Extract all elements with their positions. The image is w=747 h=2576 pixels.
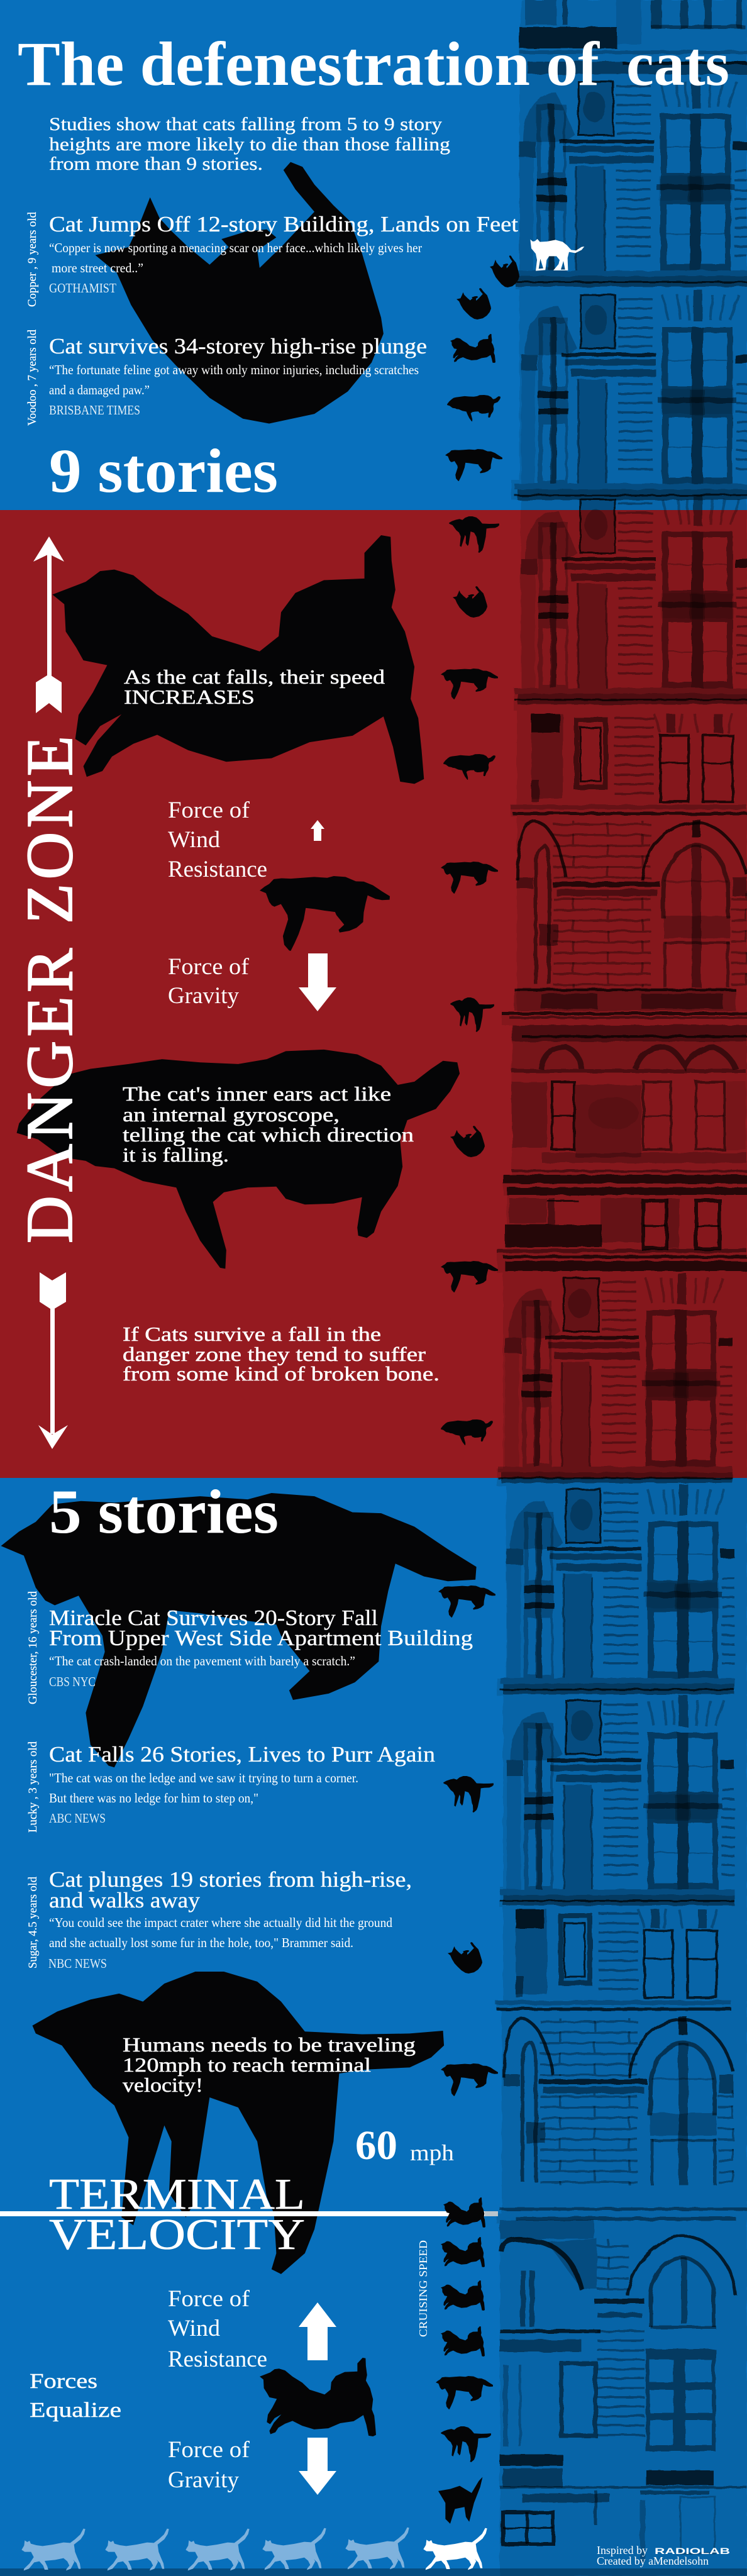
text: speed increases: INCREASES [124,686,255,708]
story: Sugar: NBC NEWS [48,1956,107,1971]
vertical label: Copper: Copper , 9 years old [26,212,39,307]
story: Gloucester: Miracle Cat Survives 20-Story Fall [49,1606,378,1630]
speed value: 60 mph: mph [410,2140,454,2165]
arrow: small wind resistance [311,820,324,841]
story: Copper: more street cred..” [52,260,143,275]
icon: white cat on the ledge [530,239,584,271]
story: Sugar [48,1867,412,1971]
story: Lucky: But there was no ledge for him to step on," [49,1790,258,1806]
text: human terminal velocity: Humans needs to be traveling [123,2033,416,2056]
big cat: curled falling cat [96,162,384,423]
story: Gloucester: From Upper West Side Apartment Building [49,1626,473,1650]
story: Lucky [49,1742,435,1826]
label: force of wind resistance: Wind [168,827,220,853]
story: Sugar: and she actually lost some fur in the hole, too," Brammer said. [49,1935,353,1950]
panel: bottom blue background [0,1478,747,2576]
heading: terminal velocity: VELOCITY [49,2211,305,2259]
story: Voodoo: and a damaged paw.” [49,382,150,397]
label: force of wind resistance, equalized: Wind [168,2316,220,2341]
label: force of gravity: Gravity [168,983,239,1009]
speed value: 60 mph: 60 [355,2123,397,2168]
label: force of wind resistance: Force of [168,797,250,823]
big cat: twisting cat in danger zone [52,535,424,784]
credits: Created by aMendelsohn [597,2555,709,2567]
text: human terminal velocity [123,2033,416,2096]
story: Lucky: "The cat was on the ledge and we saw it trying to turn a corner. [49,1770,358,1785]
heading: terminal velocity [49,2170,305,2259]
terminal velocity line [0,2211,498,2216]
text: forces equalize: Forces [30,2370,97,2393]
vertical label: Gloucester: Gloucester, 16 years old [26,1591,40,1704]
text: inner ear gyroscope: it is falling. [123,1143,229,1166]
panel: danger zone red background [0,510,747,1478]
text: forces equalize: Equalize [30,2399,121,2422]
heading: terminal velocity: TERMINAL [49,2170,305,2219]
text: inner ear gyroscope: telling the cat which direction [123,1123,414,1146]
label: force of gravity, equalized: Gravity [168,2467,239,2493]
story: Lucky: Cat Falls 26 Stories, Lives to Purr Again [49,1742,435,1767]
vertical label: Voodoo: Voodoo , 7 years old [26,330,39,426]
intro text [49,114,450,174]
bottom ground strip [0,2568,747,2576]
arrow: danger zone top [33,536,64,713]
text: speed increases: As the cat falls, their speed [124,665,385,688]
vertical label: Lucky: Lucky , 3 years old [26,1741,40,1833]
title: cats [626,29,729,99]
panel: top blue background [0,0,747,510]
label: force of wind resistance, equalized [168,2286,267,2372]
story: Copper [49,212,518,296]
story: Copper: “Copper is now sporting a menacing scar on her face...which likely gives her [49,240,422,255]
column of small falling cats [436,255,519,2524]
story: Copper: GOTHAMIST [49,280,116,296]
text: human terminal velocity: velocity! [123,2074,203,2096]
story: Gloucester: “The cat crash-landed on the pavement with barely a scratch.” [49,1653,355,1668]
row of walking cats at the bottom [21,2528,487,2570]
text: broken bones [123,1323,440,1385]
label: force of gravity, equalized [168,2437,250,2493]
intro text: heights are more likely to die than those falling [49,134,450,155]
label: force of gravity, equalized: Force of [168,2437,250,2463]
big cat: cat under force arrows in danger zone [260,876,390,951]
story: Copper: Cat Jumps Off 12-story Building, Lands on Feet [49,212,518,236]
text: inner ear gyroscope: an internal gyroscope, [123,1103,340,1126]
text: broken bones: danger zone they tend to suffer [123,1343,426,1365]
story: Voodoo [49,334,427,418]
intro text: Studies show that cats falling from 5 to 9 story [49,114,442,135]
label: force of wind resistance, equalized: Force of [168,2286,250,2312]
big cat: flat spreading cat [17,1050,460,1269]
story: Sugar: “You could see the impact crater where she actually did hit the ground [49,1915,392,1930]
big cat: cat between equal forces [260,2358,376,2436]
heading: 5 stories: 5 stories [49,1477,279,1546]
arrow: wind resistance, equalized [299,2302,336,2360]
text: forces equalize [30,2370,121,2422]
big cat: cat behind 5 stories [1,1493,477,1767]
intro text: from more than 9 stories. [49,153,263,174]
story: Voodoo: BRISBANE TIMES [49,402,140,418]
text: broken bones: If Cats survive a fall in the [123,1323,381,1345]
credits: Inspired by [597,2544,648,2557]
vertical heading: DANGER ZONE: DANGER ZONE [13,736,86,1243]
speed value: 60 mph [355,2123,454,2168]
story: Sugar: Cat plunges 19 stories from high-rise, [49,1867,412,1892]
text: speed increases [124,665,385,708]
credits: RADIOLAB [655,2546,730,2556]
story: Gloucester [49,1606,473,1689]
text: inner ear gyroscope: The cat's inner ears act like [123,1082,391,1105]
arrow: danger zone bottom [38,1272,68,1449]
label: force of wind resistance: Resistance [168,857,267,882]
building facade [495,0,747,2576]
story: Sugar: and walks away [49,1888,201,1913]
story: Voodoo: Cat survives 34-storey high-rise plunge [49,334,427,358]
story: Gloucester: CBS NYC [49,1674,96,1689]
story: Lucky: ABC NEWS [49,1811,106,1826]
label: force of gravity [168,954,250,1009]
text: broken bones: from some kind of broken bone. [123,1362,440,1385]
arrow: gravity [299,953,336,1011]
vertical label: Sugar: Sugar, 4.5 years old [26,1877,40,1968]
label: force of gravity: Force of [168,954,250,980]
title: The defenestration of [18,29,600,99]
story: Voodoo: “The fortunate feline got away with only minor injuries, including scratches [49,362,419,377]
label: force of wind resistance, equalized: Resistance [168,2346,267,2372]
arrow: gravity, equalized [299,2438,336,2495]
label: force of wind resistance [168,797,267,882]
credits [597,2544,730,2567]
vertical label: cruising speed: CRUISING SPEED [417,2240,429,2337]
text: human terminal velocity: 120mph to reach terminal [123,2053,371,2076]
text: inner ear gyroscope [123,1082,414,1166]
heading: 9 stories: 9 stories [49,436,278,506]
big cat: arched terminal velocity cat [33,1972,444,2274]
